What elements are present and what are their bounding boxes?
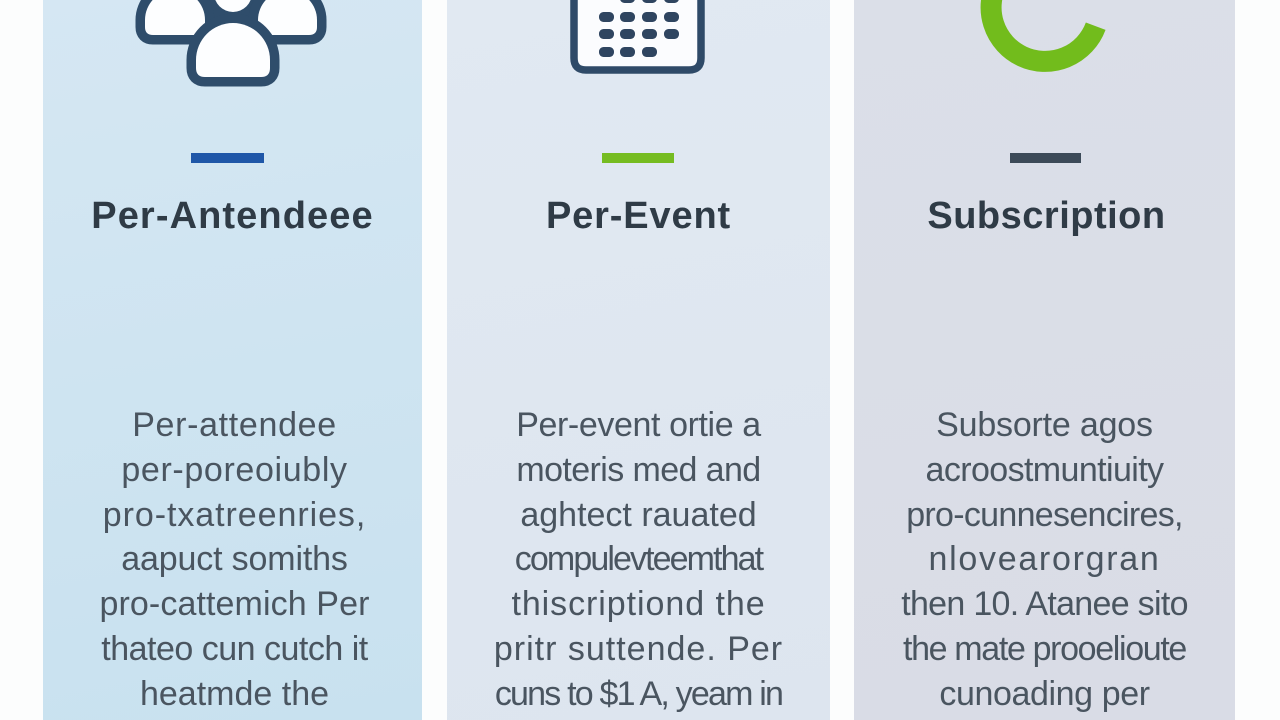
panel: per-attendee [43, 0, 422, 720]
text block: per-attendee: pro-cattemich Per [99, 585, 370, 623]
text block: subscription: the mate prooelioute [903, 630, 1186, 668]
text block: per-attendee: aapuct somiths [121, 540, 348, 578]
heading: subscription: Subscription [927, 195, 1166, 237]
text block: per-event: thiscriptiond the [511, 585, 766, 623]
accent bar: dark [1010, 153, 1081, 163]
text block: subscription [901, 406, 1188, 713]
text block: subscription: then 10. Atanee sito [901, 585, 1188, 623]
heading: per-attendee: Per-Antendeee [91, 195, 374, 237]
text block: per-event: aghtect rauated [520, 496, 757, 534]
text block: subscription: Subsorte agos [936, 406, 1153, 444]
text block: per-event: cuns to $1 A, yeam in [495, 675, 782, 713]
text block: per-attendee: heatmde the [140, 675, 329, 713]
text block: per-attendee: per-poreoiubly [121, 451, 348, 489]
text block: per-event: Per-event ortie a [516, 406, 761, 444]
icon: green ring [980, 0, 1106, 72]
text block: subscription: acroostmuntiuity [926, 451, 1163, 489]
text block: per-event: pritr suttende. Per [494, 630, 783, 668]
text block: per-attendee: pro-txatreenries, [103, 496, 366, 534]
text block: per-attendee [99, 406, 370, 713]
panel: subscription [854, 0, 1235, 720]
accent bar: green [602, 153, 674, 163]
text block: per-event: moteris med and [516, 451, 761, 489]
icon: calendar [570, 0, 705, 74]
icon: group of people [136, 0, 326, 86]
text block: per-attendee: thateo cun cutch it [101, 630, 368, 668]
text block: per-event: compulevteemthat [515, 540, 762, 578]
text block: subscription: nlovearorgran [929, 540, 1160, 578]
text block: subscription: pro-cunnesencires, [906, 496, 1183, 534]
heading: per-event: Per-Event [546, 195, 731, 237]
text block: subscription: cunoading per [939, 675, 1150, 713]
panel: per-event [447, 0, 830, 720]
text block: per-attendee: Per-attendee [132, 406, 337, 444]
accent bar: blue [191, 153, 264, 163]
text block: per-event [494, 406, 783, 713]
